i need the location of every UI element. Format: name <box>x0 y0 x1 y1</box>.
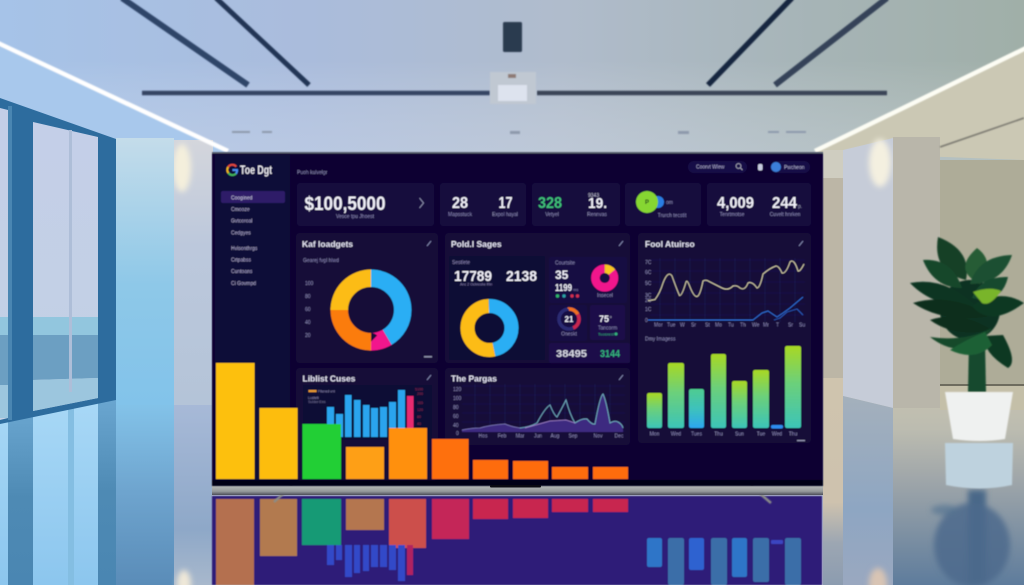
panel: sales summary <box>445 233 630 363</box>
line chart: 7C <box>645 260 652 266</box>
reflected colour bars <box>216 499 628 585</box>
area chart: 40 <box>453 423 459 429</box>
lower left ceiling <box>0 47 228 160</box>
kpi card: toggle circles <box>625 183 701 226</box>
line chart: 1C <box>645 307 652 313</box>
mini card: pink donut: 35 <box>555 268 569 282</box>
x labels: Sr <box>691 322 696 328</box>
tv bottom bezel <box>212 486 823 495</box>
wall strip beside screen <box>823 150 845 180</box>
chart card <box>303 385 432 440</box>
plant pot <box>945 392 1013 441</box>
pot reflection <box>945 443 1013 488</box>
mini card: gauge: Oneskt <box>561 332 578 338</box>
right column <box>843 137 940 585</box>
kpi card: totals: Tenrtmotse <box>720 212 745 218</box>
axis labels: 80 <box>305 294 311 300</box>
ceiling ducts <box>122 0 1024 147</box>
area chart: Feb <box>498 434 507 440</box>
axis labels: 60 <box>305 307 311 313</box>
bar chart: Thu <box>789 432 798 438</box>
kpi card: green value: Rennvas <box>587 212 607 218</box>
panel arrow icon <box>799 241 803 246</box>
x labels: Sr <box>788 322 793 328</box>
bar chart: Tues <box>691 432 702 438</box>
kpi card: green value <box>532 183 620 226</box>
right back wall <box>940 160 1024 385</box>
area chart: 100 <box>453 396 462 402</box>
mini card: gauge <box>549 305 587 341</box>
legend: Lusteti <box>308 396 319 400</box>
kpi card: green value: Vetyel <box>545 212 559 218</box>
bar chart <box>647 346 805 441</box>
kpi card: counts: Mapsstuck <box>448 212 472 218</box>
line chart: 5C <box>645 281 652 287</box>
x labels: St <box>705 322 710 328</box>
panel arrow icon <box>619 241 623 246</box>
mini card: pink donut: ms <box>573 287 578 292</box>
lower right ceiling <box>815 50 1024 160</box>
mini card: percentage: o <box>610 314 612 319</box>
column floor reflection <box>843 396 893 585</box>
mini card: bottom values: 38495 <box>556 348 587 360</box>
stat card: 2138 <box>506 268 537 285</box>
kpi card: revenue: Vesce tpu Jhoest <box>336 214 375 220</box>
area chart: Mar <box>516 434 525 440</box>
menu items: Hvisonthrgs <box>231 246 258 252</box>
menu items: Cmooze <box>231 207 250 213</box>
red axis labels: 80 <box>417 415 421 419</box>
area chart: Nov <box>594 434 603 440</box>
panel: line and bars: Dmy Imagess <box>645 336 676 342</box>
panel: latest cases <box>296 368 438 480</box>
ceiling light strips <box>0 43 1024 151</box>
x labels: We <box>752 322 760 328</box>
legend: Sulder Ens <box>308 400 326 404</box>
axis labels: 40 <box>305 320 311 326</box>
blue lines <box>648 297 803 320</box>
kpi card: totals: p. <box>798 204 802 210</box>
x labels: Th <box>740 322 746 328</box>
right floor <box>823 385 1024 585</box>
line chart: 6C <box>645 270 652 276</box>
axis labels: 100 <box>305 281 314 287</box>
legend <box>308 390 335 404</box>
panel: area chart <box>445 368 630 445</box>
panel: latest cases: Liblist Cuses <box>302 374 356 384</box>
mini card: pink donut: 1199 <box>555 283 572 294</box>
bar chart: Mon <box>650 432 660 438</box>
kpi card: counts: 17 <box>498 195 513 212</box>
line chart: 2C <box>645 298 652 304</box>
red axis labels: 40 <box>417 422 421 426</box>
search icon <box>736 164 742 170</box>
logo title: Toe Dgt <box>240 163 272 177</box>
tv stand legs <box>274 486 771 503</box>
area chart: Hos <box>479 434 488 440</box>
area chart <box>453 384 625 440</box>
x labels: Mo <box>715 322 722 328</box>
menu items: Cedgyes <box>231 230 251 236</box>
left column <box>116 138 213 405</box>
plant and pot <box>910 237 1024 441</box>
menu items: Gvtcoroal <box>231 218 252 224</box>
breadcrumb: Puoh kulvelgr <box>297 170 328 176</box>
panel: donut overview <box>296 233 438 363</box>
kpi card: green value: 9343 <box>588 193 599 199</box>
red axis labels: 200 <box>417 392 423 396</box>
top bar <box>688 161 810 173</box>
kpi card: toggle circles: P <box>645 200 649 206</box>
x labels: Tu <box>728 322 734 328</box>
mini card: percentage: Tancorm <box>598 326 617 332</box>
red axis labels: 5100 <box>415 388 423 392</box>
panel: line and bars: Fool Atuirso <box>645 239 695 249</box>
donut chart <box>339 278 403 342</box>
kpi card: revenue: $100,5000 <box>304 194 386 215</box>
menu items: Crtpabss <box>231 258 252 264</box>
red axis labels: 120 <box>417 408 423 412</box>
kpi card: toggle circles: Trurch tecstit <box>658 213 687 219</box>
kpi card: totals: 4,009 <box>717 195 754 212</box>
top bar: Pwcheon <box>784 165 805 171</box>
bar chart: Wed <box>671 432 681 438</box>
line chart <box>645 258 805 328</box>
sidebar <box>215 155 290 480</box>
legend: Fltered vnt <box>318 390 335 394</box>
mini card: pink donut <box>549 257 627 303</box>
bar chart: Thu <box>714 432 723 438</box>
dashboard screen <box>212 152 823 486</box>
red axis labels: 165 <box>417 401 423 405</box>
logo icon <box>227 165 237 175</box>
area chart: Jun <box>534 434 542 440</box>
stat card <box>449 256 545 360</box>
area chart: 120 <box>453 387 462 393</box>
mini card: pink donut: Insecel <box>597 293 613 299</box>
x labels: Mr <box>763 322 769 328</box>
bar chart: Wed <box>772 432 782 438</box>
kpi card: toggle circles: om <box>666 200 673 206</box>
area chart: Sep <box>569 434 578 440</box>
panel arrow icon <box>619 375 623 380</box>
donut chart small <box>468 306 512 350</box>
plant reflection on floor <box>931 490 1010 585</box>
kpi card: totals: Cuvelt hnrken <box>770 212 801 218</box>
stat card: 17789 <box>454 268 492 285</box>
cream line <box>648 261 804 301</box>
user icon <box>758 164 762 170</box>
avatar <box>771 162 781 172</box>
x labels <box>654 322 805 328</box>
axis labels: 20 <box>305 333 311 339</box>
x labels: Tue <box>667 322 676 328</box>
kpi card: counts <box>440 183 526 226</box>
area chart: 60 <box>453 414 459 420</box>
x labels: W <box>680 322 685 328</box>
ceiling speaker <box>503 22 522 52</box>
tv centre notch <box>490 485 541 488</box>
axis labels <box>305 281 314 339</box>
ceiling vents <box>232 131 806 134</box>
red axis labels <box>415 388 423 426</box>
menu items <box>231 196 258 287</box>
top bar: Coorvt Wlew <box>696 164 725 170</box>
x labels: Su <box>799 322 805 328</box>
mini card: percentage: 75 <box>599 314 609 324</box>
screen bottom edge <box>212 480 823 486</box>
mini card: bottom values <box>549 343 630 363</box>
mini card: percentage: Tuosxest <box>598 332 615 336</box>
bar chart: Sun <box>735 432 744 438</box>
overlay colour bar chart <box>216 363 628 479</box>
kpi card: counts: Expol hayal <box>492 212 518 218</box>
panel arrow icon <box>427 241 431 246</box>
window wall <box>0 98 116 424</box>
plant foliage <box>910 237 1024 392</box>
kpi card: totals <box>707 183 811 226</box>
panel: donut overview: Kaf loadgets <box>302 239 353 249</box>
panel: sales summary: Pold.l Sages <box>451 239 502 249</box>
kpi card: green value: 328 <box>538 195 562 212</box>
x labels: T <box>776 322 779 328</box>
kpi card: green value: 19. <box>588 195 607 212</box>
mini card: pink donut: Courtsite <box>555 260 575 266</box>
kpi card: revenue <box>297 183 434 226</box>
panel: line and bars <box>638 233 811 443</box>
panel arrow icon <box>427 375 431 380</box>
area chart: Dec <box>615 434 624 440</box>
area chart: 80 <box>453 405 459 411</box>
reflection of the screen on the floor <box>212 496 822 585</box>
stat card: Anc 2 Ochreshe Rtn <box>460 282 492 286</box>
area chart: Aug <box>551 434 560 440</box>
window view <box>33 317 98 335</box>
stat card: Sestlete <box>452 260 470 266</box>
line chart: 0 <box>645 318 648 324</box>
reflected mini bars <box>327 545 413 581</box>
mini card: bottom values: 3144 <box>600 348 620 360</box>
panel: donut overview: Gearej fvgl hlwd <box>303 258 339 264</box>
area chart: 0 <box>456 431 459 437</box>
kpi card: counts: 28 <box>452 195 468 212</box>
panel: area chart: The Pargas <box>451 374 497 384</box>
x labels: Mor <box>654 322 663 328</box>
mini card: percentage <box>590 305 625 340</box>
chevron <box>420 198 424 208</box>
menu items: Coogined <box>231 196 253 202</box>
menu items: Cuntoans <box>231 269 253 275</box>
bar chart: Tue <box>757 432 765 438</box>
reflected green bars <box>647 538 801 585</box>
ceiling projector box <box>490 72 536 104</box>
mini bar chart <box>327 390 414 437</box>
active menu item <box>221 191 285 203</box>
kpi card: totals: 244 <box>772 195 797 212</box>
mini card: gauge: 21 <box>565 315 574 324</box>
left floor reflections <box>0 400 212 585</box>
menu items: Ci Govmpd <box>231 281 256 287</box>
line chart: 3C <box>645 293 652 299</box>
